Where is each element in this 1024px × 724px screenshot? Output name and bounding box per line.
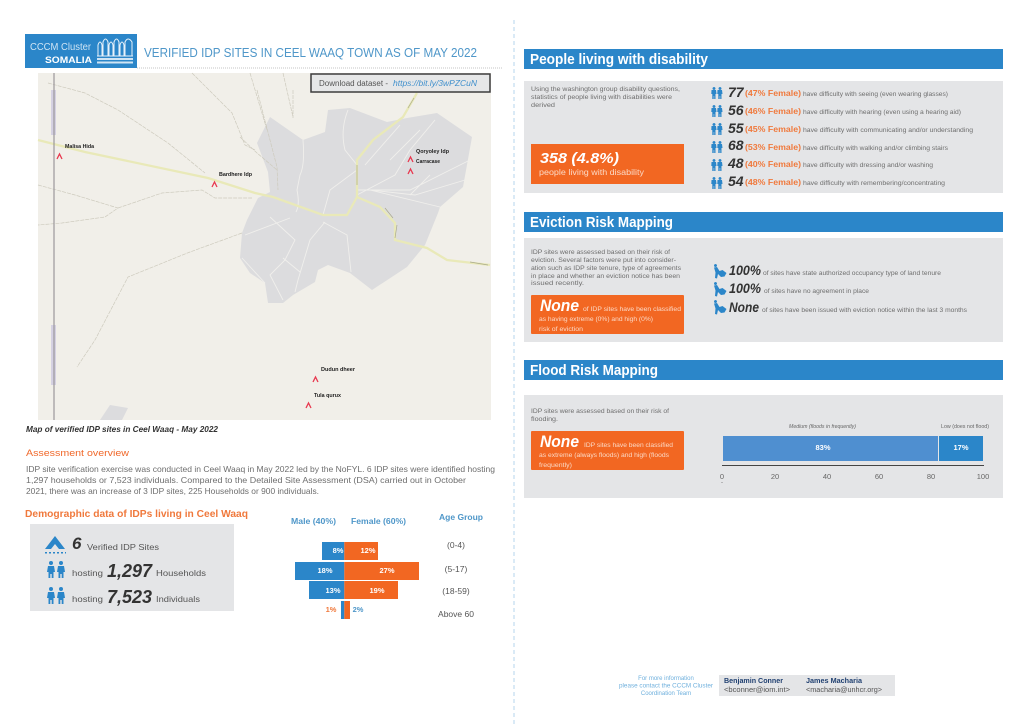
callout: 358 people: people living with disability <box>539 168 644 177</box>
panel: disability <box>524 81 1003 193</box>
eviction rows: None <box>729 299 759 315</box>
panel: eviction: issued recently. <box>531 280 584 287</box>
flood stacked bar chart: 80 <box>927 472 935 481</box>
callout: no eviction risk: as having extreme (0%) and high (0%) <box>539 316 653 323</box>
population pyramid chart: 2% <box>353 605 364 614</box>
callout: 358 people <box>531 144 684 184</box>
panel: key figures: Households <box>156 568 206 578</box>
callout: no flood risk <box>531 431 684 470</box>
site labels: Bardhere Idp <box>219 172 252 178</box>
population pyramid chart: 27% <box>379 566 395 575</box>
title: VERIFIED IDP SITES IN CEEL WAAQ TOWN AS OF MAY 2022 <box>144 46 477 60</box>
disability rows: (45% Female) <box>745 125 801 134</box>
panel: key figures: hosting <box>72 568 103 578</box>
site labels: Qoryoley Idp <box>416 149 449 155</box>
population pyramid chart: (18-59) <box>442 586 470 596</box>
town area <box>240 108 472 303</box>
callout: no eviction risk: risk of eviction <box>539 326 583 333</box>
population pyramid chart: Above 60 <box>438 609 474 619</box>
logo: CCCM Cluster Somalia <box>25 34 137 68</box>
disability rows: (48% Female) <box>745 178 801 187</box>
download dataset box: Download dataset - <box>319 79 388 88</box>
site labels: Tula qurux <box>314 393 341 399</box>
flood stacked bar chart: 83% <box>815 443 831 452</box>
disability rows: 68 <box>728 137 744 153</box>
flood stacked bar chart: Medium (floods in frequently) <box>789 424 856 430</box>
map of IDP sites <box>38 73 491 420</box>
callout: no flood risk: as extreme (always floods) and high (floods <box>539 452 670 459</box>
icon: people individuals <box>47 587 65 604</box>
population pyramid chart: 1% <box>326 605 337 614</box>
population pyramid chart: 13% <box>325 586 341 595</box>
panel: key figures: 1,297 <box>107 561 153 581</box>
section: flood risk mapping <box>524 360 1003 380</box>
panel: disability: derived <box>531 102 555 109</box>
disability rows: have difficulty with communicating and/or understanding <box>803 127 973 134</box>
panel: eviction: IDP sites were assessed based on their risk of <box>531 249 670 256</box>
section: eviction risk mapping <box>524 212 1003 232</box>
population pyramid chart: (5-17) <box>445 564 467 574</box>
panel: disability: statistics of people living with disabilities were <box>531 94 672 101</box>
disability rows: 77 <box>728 84 745 100</box>
disability rows: have difficulty with dressing and/or washing <box>803 162 933 169</box>
panel: key figures: hosting <box>72 594 103 604</box>
population pyramid chart: 8% <box>333 546 344 555</box>
population pyramid chart <box>291 513 483 619</box>
icon: tent <box>45 536 66 554</box>
population pyramid chart: (0-4) <box>447 540 465 550</box>
disability rows: have difficulty with hearing (even using a hearing aid) <box>803 109 961 116</box>
assessment overview text <box>26 464 495 496</box>
disability rows: (53% Female) <box>745 143 801 152</box>
disability rows: (40% Female) <box>745 160 801 169</box>
callout: no eviction risk: of IDP sites have been classified <box>583 306 681 313</box>
assessment overview heading: Assessment overview <box>26 448 129 459</box>
panel: key figures <box>30 524 234 611</box>
eviction rows: 100% <box>729 280 761 296</box>
panel: disability: Using the washington group disability questions, <box>531 86 680 93</box>
contact box: <bconner@iom.int> <box>724 687 790 694</box>
contact box <box>719 675 895 696</box>
callout: no flood risk: None <box>540 432 579 451</box>
contact note: please contact the CCCM Cluster <box>619 684 713 690</box>
disability rows: 54 <box>728 173 744 189</box>
disability rows: have difficulty with walking and/or climbing stairs <box>803 145 949 152</box>
flood stacked bar chart: 17% <box>953 443 969 452</box>
disability rows: 56 <box>728 102 744 118</box>
main road <box>38 93 490 265</box>
flood stacked bar chart: 100 <box>977 472 989 481</box>
contact note: Coordination Team <box>641 691 691 697</box>
population pyramid chart: 12% <box>360 546 376 555</box>
site markers <box>57 154 413 408</box>
section: eviction risk mapping: Eviction Risk Mapping <box>530 215 673 231</box>
demographic heading: Demographic data of IDPs living in Ceel Waaq <box>25 508 248 520</box>
flood stacked bar chart <box>720 424 989 483</box>
panel: key figures: Verified IDP Sites <box>87 542 159 552</box>
callout: no flood risk: frequently) <box>539 462 572 469</box>
panel: eviction <box>524 238 1003 342</box>
download dataset box: https://bit.ly/3wPZCuN <box>393 79 477 88</box>
site labels <box>65 144 449 399</box>
panel: eviction: ation such as IDP site tenure, type of agreements <box>531 265 682 272</box>
disability rows: 55 <box>728 120 744 136</box>
disability rows: 48 <box>727 155 744 171</box>
site labels: Malisa Hida <box>65 144 94 150</box>
eviction rows: of sites have been issued with eviction notice within the last 3 months <box>762 307 968 314</box>
panel: eviction: in place and whether an eviction notice has been <box>531 273 680 280</box>
flood stacked bar chart: 0 <box>720 472 724 481</box>
eviction rows: of sites have state authorized occupancy type of land tenure <box>763 270 941 277</box>
population pyramid chart: Age Group <box>439 513 483 522</box>
population pyramid chart: Female (60%) <box>351 517 406 526</box>
section: flood risk mapping: Flood Risk Mapping <box>530 363 658 379</box>
contact box: James Macharia <box>806 678 862 685</box>
site labels: Dudun dheer <box>321 367 355 373</box>
callout: no eviction risk: None <box>540 296 579 315</box>
flood stacked bar chart: 60 <box>875 472 883 481</box>
panel: key figures: 7,523 <box>107 587 152 607</box>
callout: no eviction risk <box>531 295 684 334</box>
flood stacked bar chart: Low (does not flood) <box>941 424 989 430</box>
disability rows <box>711 84 973 189</box>
boundary line <box>51 73 128 420</box>
panel: key figures: Individuals <box>156 594 200 604</box>
eviction rows: 100% <box>729 262 761 278</box>
population pyramid chart: 18% <box>317 566 333 575</box>
panel: flood: flooding. <box>531 416 558 423</box>
site labels: Carracase <box>416 159 440 165</box>
contact box: Benjamin Conner <box>724 678 783 685</box>
icon: people households <box>47 561 65 578</box>
panel: key figures: 6 <box>72 534 82 553</box>
disability rows: have difficulty with remembering/concentrating <box>803 180 945 187</box>
flood stacked bar chart: 40 <box>823 472 831 481</box>
disability rows: (47% Female) <box>745 89 801 98</box>
map caption: Map of verified IDP sites in Ceel Waaq - May 2022 <box>26 424 218 434</box>
section: people living with disability <box>524 49 1003 69</box>
population pyramid chart: 19% <box>369 586 385 595</box>
assessment overview text: 2021, there was an increase of 3 IDP sites, 225 Households or 900 individuals. <box>26 486 319 496</box>
panel: flood <box>524 395 1003 498</box>
disability rows: (46% Female) <box>745 107 801 116</box>
panel: flood: IDP sites were assessed based on their risk of <box>531 408 669 415</box>
download dataset box <box>311 74 490 92</box>
callout: 358 people: 358 (4.8%) <box>540 150 619 167</box>
population pyramid chart: Male (40%) <box>291 517 336 526</box>
disability rows: have difficulty with seeing (even wearing glasses) <box>803 91 948 98</box>
contact note <box>619 676 713 697</box>
section: people living with disability: People living with disability <box>530 52 708 68</box>
assessment overview text: 1,297 households or 7,523 individuals. Compared to the Detailed Site Assessment (DSA) carried out in October <box>26 475 466 485</box>
contact note: For more information <box>638 676 694 682</box>
logo: CCCM Cluster Somalia: CCCM Cluster <box>30 42 92 53</box>
eviction rows <box>714 262 968 315</box>
flood stacked bar chart: 20 <box>771 472 779 481</box>
contact box: <macharia@unhcr.org> <box>806 687 882 694</box>
panel: eviction: eviction. Several factors were put into consider- <box>531 257 676 264</box>
assessment overview text: IDP site verification exercise was conducted in Ceel Waaq in May 2022 led by the NoFYL. 6 IDP sites were identified hosting <box>26 464 495 474</box>
eviction rows: of sites have no agreement in place <box>764 288 869 295</box>
tracks <box>38 73 293 367</box>
logo: CCCM Cluster Somalia: SOMALIA <box>45 55 92 66</box>
callout: no flood risk: IDP sites have been classified <box>584 442 673 449</box>
